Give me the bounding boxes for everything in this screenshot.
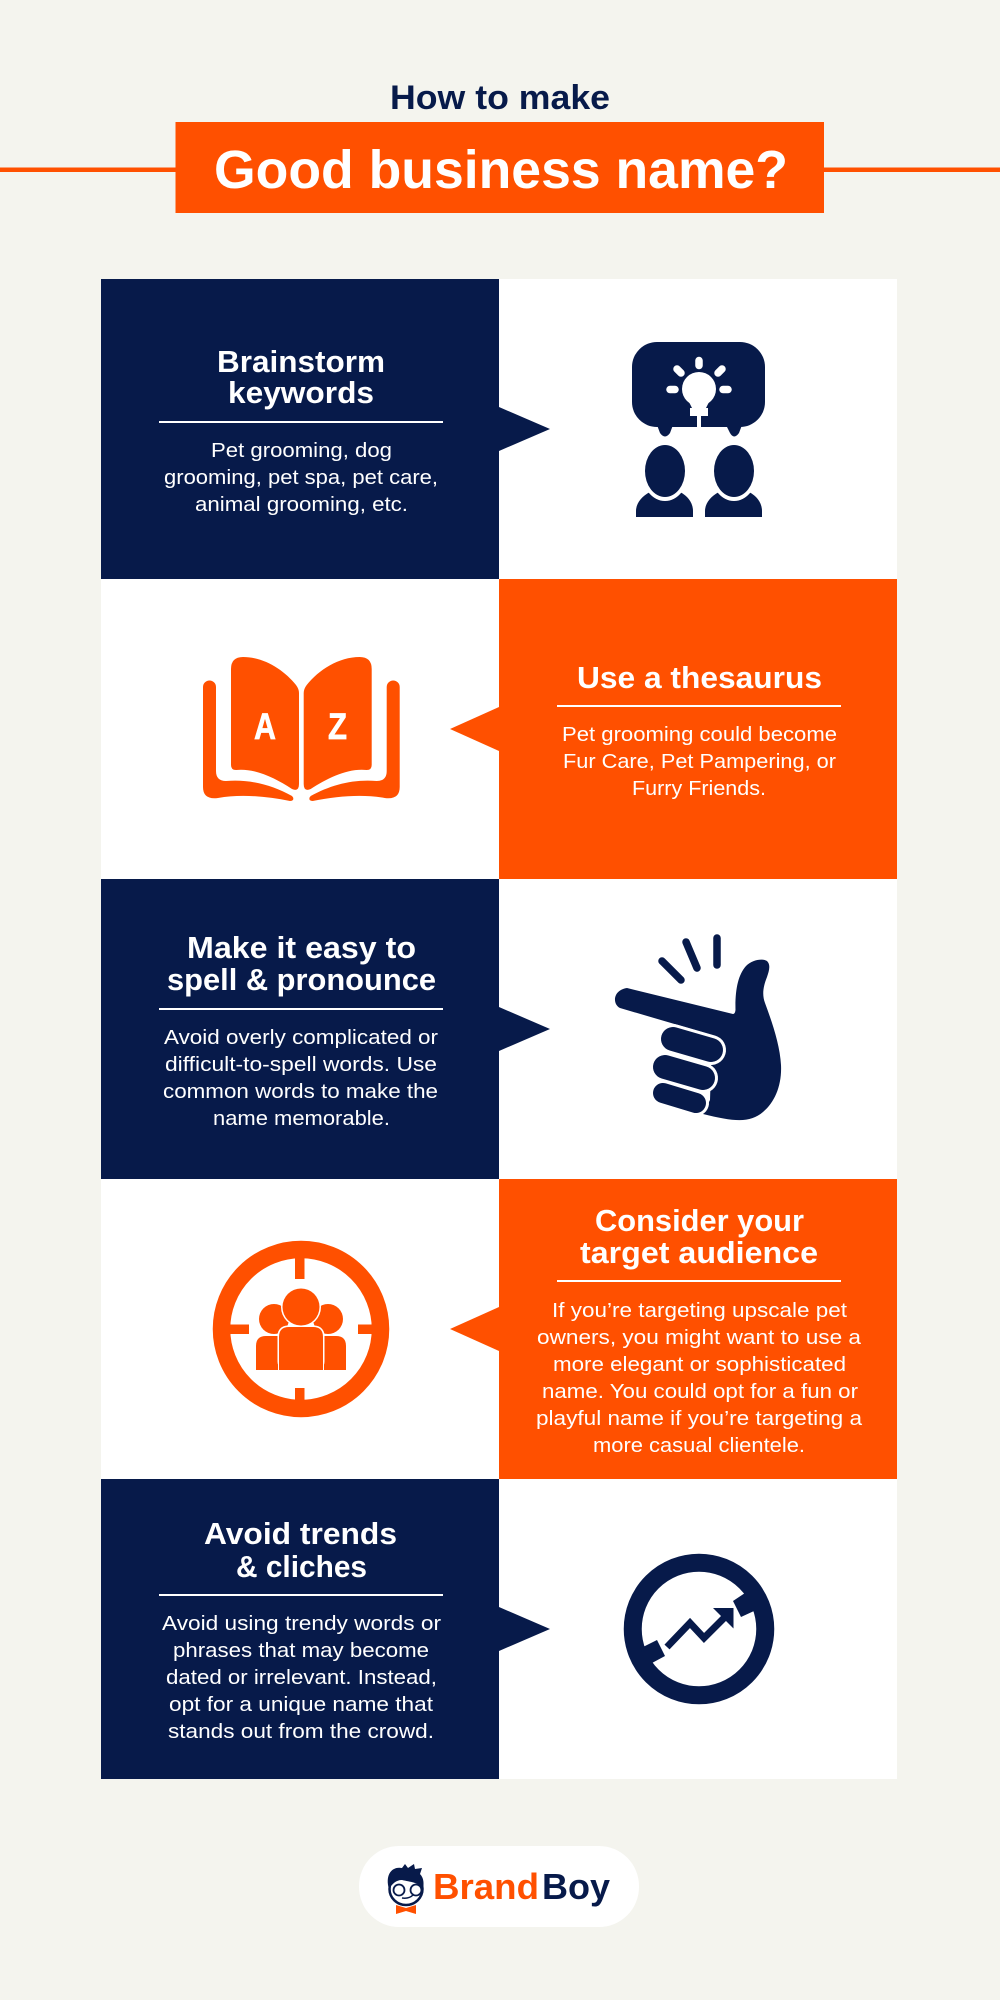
body text: grooming, pet spa, pet care,: [164, 466, 438, 489]
title banner: [176, 122, 824, 213]
icon: A-Z dictionary book: A: [254, 706, 276, 747]
body text: [163, 1026, 438, 1130]
body text: more elegant or sophisticated: [553, 1353, 846, 1376]
panel: Consider your target audience: [101, 1179, 897, 1479]
subtitle: How to make: How to make: [390, 79, 610, 117]
heading: [580, 1203, 818, 1270]
heading: & cliches: [236, 1549, 367, 1584]
pointer arrow: [499, 1607, 550, 1651]
title rule left: [0, 168, 176, 172]
heading: [217, 344, 385, 410]
body text: dated or irrelevant. Instead,: [166, 1666, 437, 1689]
heading: Make it easy to: [187, 930, 416, 965]
heading: Consider your: [595, 1203, 804, 1238]
icon: audience in crosshair target: [222, 1250, 382, 1412]
title rule right: [823, 168, 1000, 172]
body text: Pet grooming could become: [562, 723, 837, 746]
heading: spell & pronounce: [167, 962, 436, 997]
body text: [536, 1299, 863, 1457]
body text: name. You could opt for a fun or: [542, 1380, 858, 1403]
body text: Avoid using trendy words or: [162, 1612, 441, 1635]
heading: [204, 1516, 397, 1584]
pointer arrow: [450, 707, 499, 751]
panel: Brainstorm keywords: [101, 279, 897, 579]
icon: boy with glasses and bow tie: [388, 1864, 424, 1914]
pointer arrow: [499, 407, 550, 451]
heading: keywords: [228, 375, 374, 410]
icon: snapping fingers hand: [615, 938, 781, 1120]
icon: two people sharing an idea: [632, 342, 765, 517]
panel: Avoid trends & cliches: [101, 1479, 897, 1779]
icon: no trends sign: [633, 1563, 765, 1695]
body text: Fur Care, Pet Pampering, or: [563, 750, 836, 773]
body text: animal grooming, etc.: [195, 493, 408, 516]
title: Good business name?: [214, 140, 788, 200]
icon: A-Z dictionary book: [203, 657, 400, 801]
icon: A-Z dictionary book: Z: [328, 706, 347, 747]
heading: Use a thesaurus: [577, 660, 822, 695]
body text: difficult-to-spell words. Use: [165, 1053, 437, 1076]
panel: Make it easy to spell & pronounce: [101, 879, 897, 1179]
body text: common words to make the: [163, 1080, 438, 1103]
body text: If you’re targeting upscale pet: [552, 1299, 847, 1322]
body text: Avoid overly complicated or: [164, 1026, 438, 1049]
body text: more casual clientele.: [593, 1434, 805, 1457]
heading: target audience: [580, 1235, 818, 1270]
body text: [562, 723, 837, 800]
pointer arrow: [450, 1307, 499, 1351]
body text: owners, you might want to use a: [537, 1326, 862, 1349]
body text: playful name if you’re targeting a: [536, 1407, 863, 1430]
heading: [167, 930, 436, 997]
pointer arrow: [499, 1007, 550, 1051]
body text: Pet grooming, dog: [211, 439, 392, 462]
body text: [162, 1612, 441, 1743]
body text: opt for a unique name that: [169, 1693, 433, 1716]
logo: BrandBoy: [359, 1846, 639, 1927]
panel: Use a thesaurus: [101, 579, 897, 879]
body text: stands out from the crowd.: [168, 1720, 434, 1743]
body text: [164, 439, 438, 516]
heading: Brainstorm: [217, 344, 385, 379]
body text: phrases that may become: [173, 1639, 429, 1662]
heading: Avoid trends: [204, 1516, 397, 1551]
header: [0, 79, 1000, 213]
body text: Furry Friends.: [632, 777, 766, 800]
body text: name memorable.: [213, 1107, 390, 1130]
wordmark: Boy: [542, 1866, 610, 1907]
wordmark: Brand: [433, 1866, 539, 1907]
